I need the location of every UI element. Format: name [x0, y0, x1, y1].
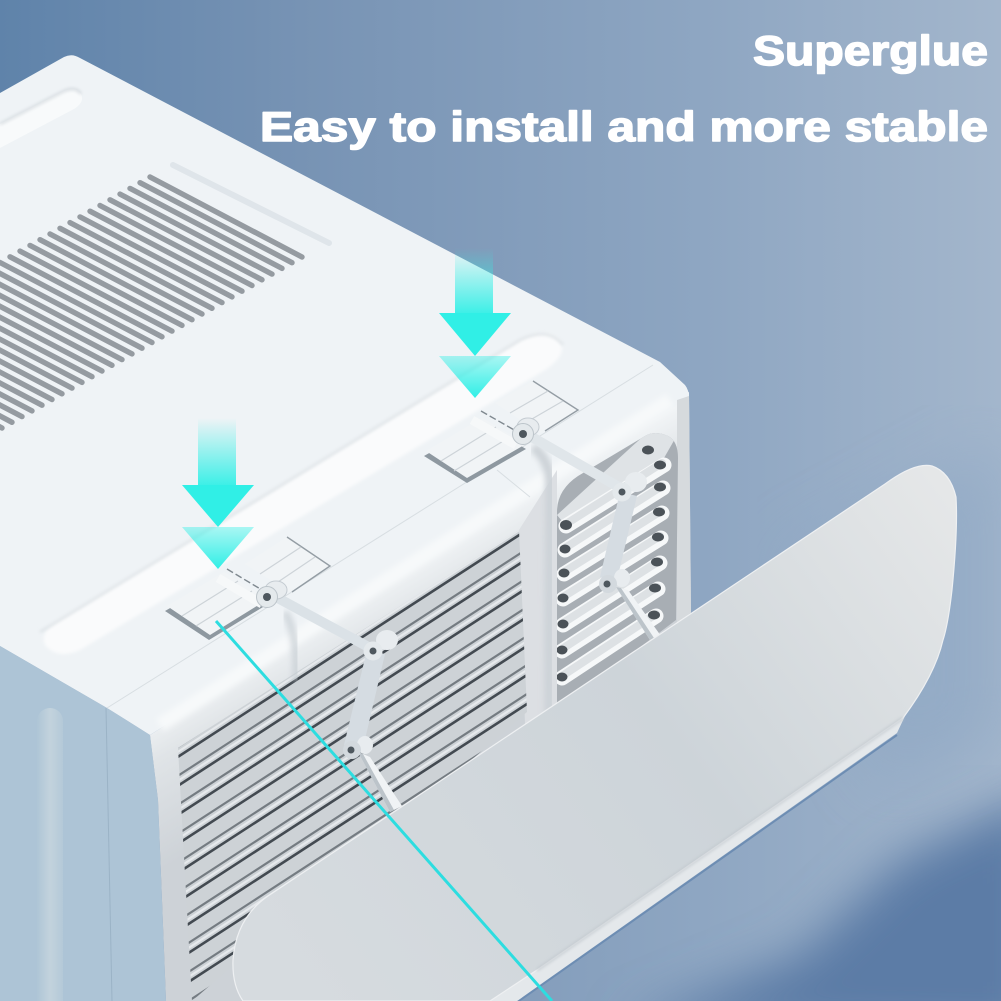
upper pad — [245, 537, 330, 592]
center strip — [472, 420, 516, 445]
middle arm — [600, 492, 637, 580]
panel body — [233, 465, 956, 1001]
joint 1 — [512, 418, 539, 444]
lower pad — [424, 423, 526, 483]
joint 3 — [599, 569, 630, 593]
arm shadow strip — [285, 612, 296, 680]
arrow: right pair — [439, 248, 511, 398]
side seam — [106, 708, 112, 1001]
lower arm — [616, 587, 661, 640]
column between vents — [519, 470, 557, 790]
joint 2 — [612, 472, 647, 502]
joint 3 — [343, 736, 373, 759]
panel rim shadow — [516, 735, 897, 1001]
middle arm — [344, 650, 385, 748]
side vent with fins — [557, 433, 678, 702]
lower pad — [165, 577, 268, 640]
top edge highlight — [160, 400, 670, 725]
title line 1: Superglue — [753, 27, 988, 74]
top left handle slot — [0, 89, 82, 148]
upper arm — [530, 436, 624, 490]
upper arm — [274, 596, 374, 650]
joint 1 — [256, 581, 287, 608]
seam lines — [107, 365, 653, 708]
groove shading — [40, 334, 563, 632]
mounting bracket: right — [424, 381, 661, 640]
cyan pointer line — [216, 621, 552, 1001]
arrow: left pair — [182, 418, 254, 569]
panel rim — [486, 716, 905, 1001]
center strip — [218, 578, 262, 604]
title line 2: Easy to install and more stable — [260, 103, 988, 150]
wind deflector panel — [233, 465, 956, 1001]
title — [260, 27, 988, 150]
upper pad — [495, 381, 578, 433]
panel crease — [537, 718, 903, 970]
joint 2 — [364, 630, 398, 660]
top vent slot — [173, 165, 329, 243]
front vent grille — [170, 518, 530, 1001]
air conditioner unit — [0, 55, 691, 1001]
column shadow edge — [533, 447, 550, 720]
front face — [150, 392, 691, 1001]
top face — [0, 55, 689, 735]
side slot — [37, 708, 63, 1001]
lower arm — [358, 752, 402, 812]
long top groove — [44, 333, 562, 654]
front right edge — [677, 396, 691, 625]
mounting bracket: left — [165, 537, 402, 812]
top vent grille — [0, 177, 302, 428]
left side face — [0, 646, 166, 1001]
